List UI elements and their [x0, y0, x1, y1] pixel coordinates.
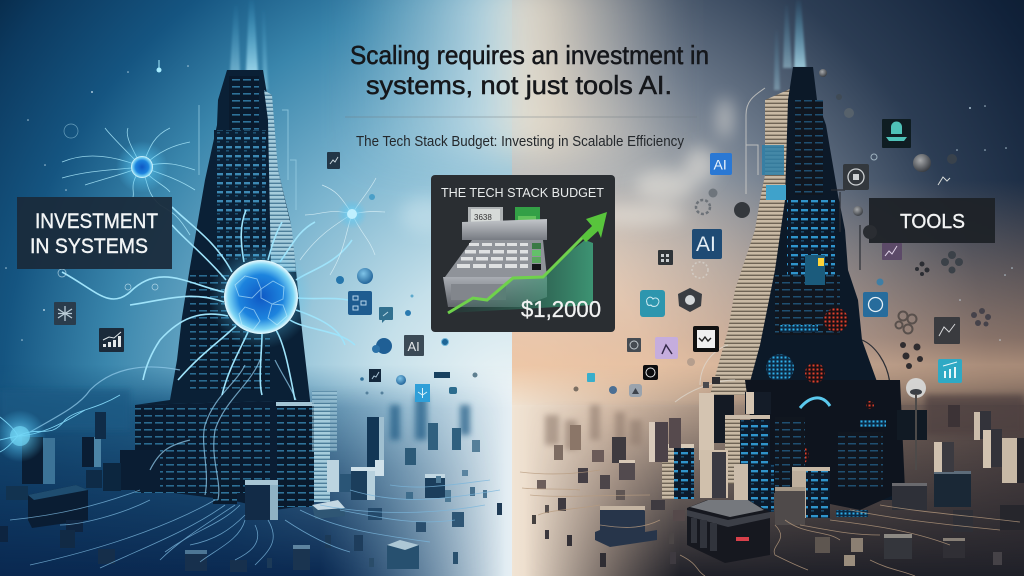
label: tools: TOOLS [900, 211, 965, 233]
left floating icons: AI [408, 339, 420, 354]
left tower [135, 0, 310, 405]
title [350, 40, 709, 100]
budget amount: $1,2000 [521, 296, 601, 322]
ground and distant skyline: right tools side [512, 360, 1024, 576]
icon: cash register: 3638 [474, 213, 492, 222]
left tower data cables [30, 360, 296, 500]
ground and distant skyline: left systems side [0, 360, 512, 576]
subtitle: The Tech Stack Budget: Investing in Scalable Efficiency [356, 134, 685, 150]
title: systems, not just tools AI. [366, 70, 672, 100]
label: investment in systems [17, 197, 172, 269]
right floating icons: AI [714, 156, 727, 172]
right floating icons: AI [696, 233, 716, 256]
growth chart arrow [448, 212, 607, 313]
title: Scaling requires an investment in [350, 40, 709, 70]
budget card [431, 175, 615, 332]
left circuit wires [10, 480, 500, 568]
glowing neuron lower left [0, 395, 120, 462]
right floating beads and spheres [692, 69, 991, 369]
right city buildings [532, 363, 1024, 567]
label: investment in systems: IN SYSTEMS [30, 235, 148, 258]
right circuit wires [520, 470, 1020, 576]
label: tools [869, 198, 995, 243]
left floating icons [54, 152, 478, 402]
large neuron with radiating filaments [58, 207, 362, 400]
right floating icons [574, 119, 962, 397]
label: investment in systems: INVESTMENT [35, 210, 158, 233]
right tower [675, 0, 900, 500]
left city buildings [0, 390, 502, 572]
small neuron upper left [62, 60, 195, 235]
icon: cash register [443, 207, 547, 307]
card heading: THE TECH STACK BUDGET [441, 185, 604, 200]
background sky: blue left, warm right [0, 0, 1024, 410]
small neuron centre left [300, 178, 385, 275]
